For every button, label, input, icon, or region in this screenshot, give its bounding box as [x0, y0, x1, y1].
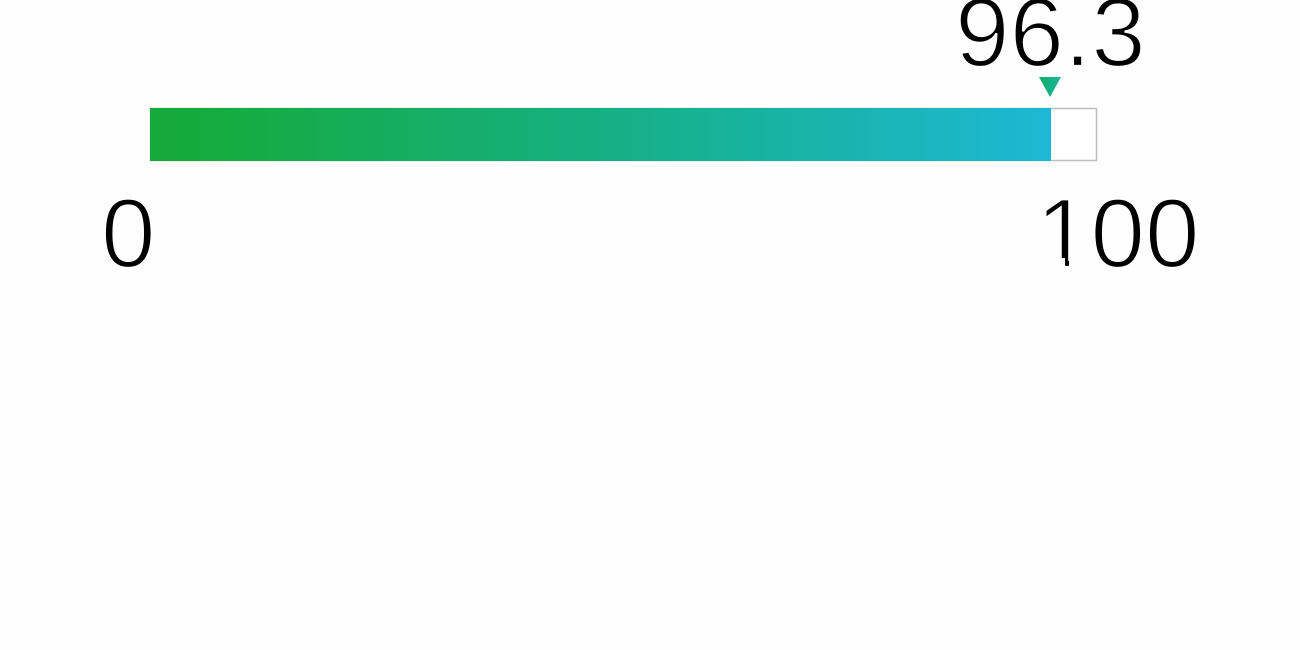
gauge fill bar	[150, 108, 1051, 161]
axis minimum label: 0	[101, 178, 156, 288]
value marker triangle	[1039, 77, 1061, 97]
axis maximum label: 100	[1036, 178, 1200, 288]
gauge chart	[101, 0, 1200, 288]
gauge track	[150, 108, 1096, 160]
